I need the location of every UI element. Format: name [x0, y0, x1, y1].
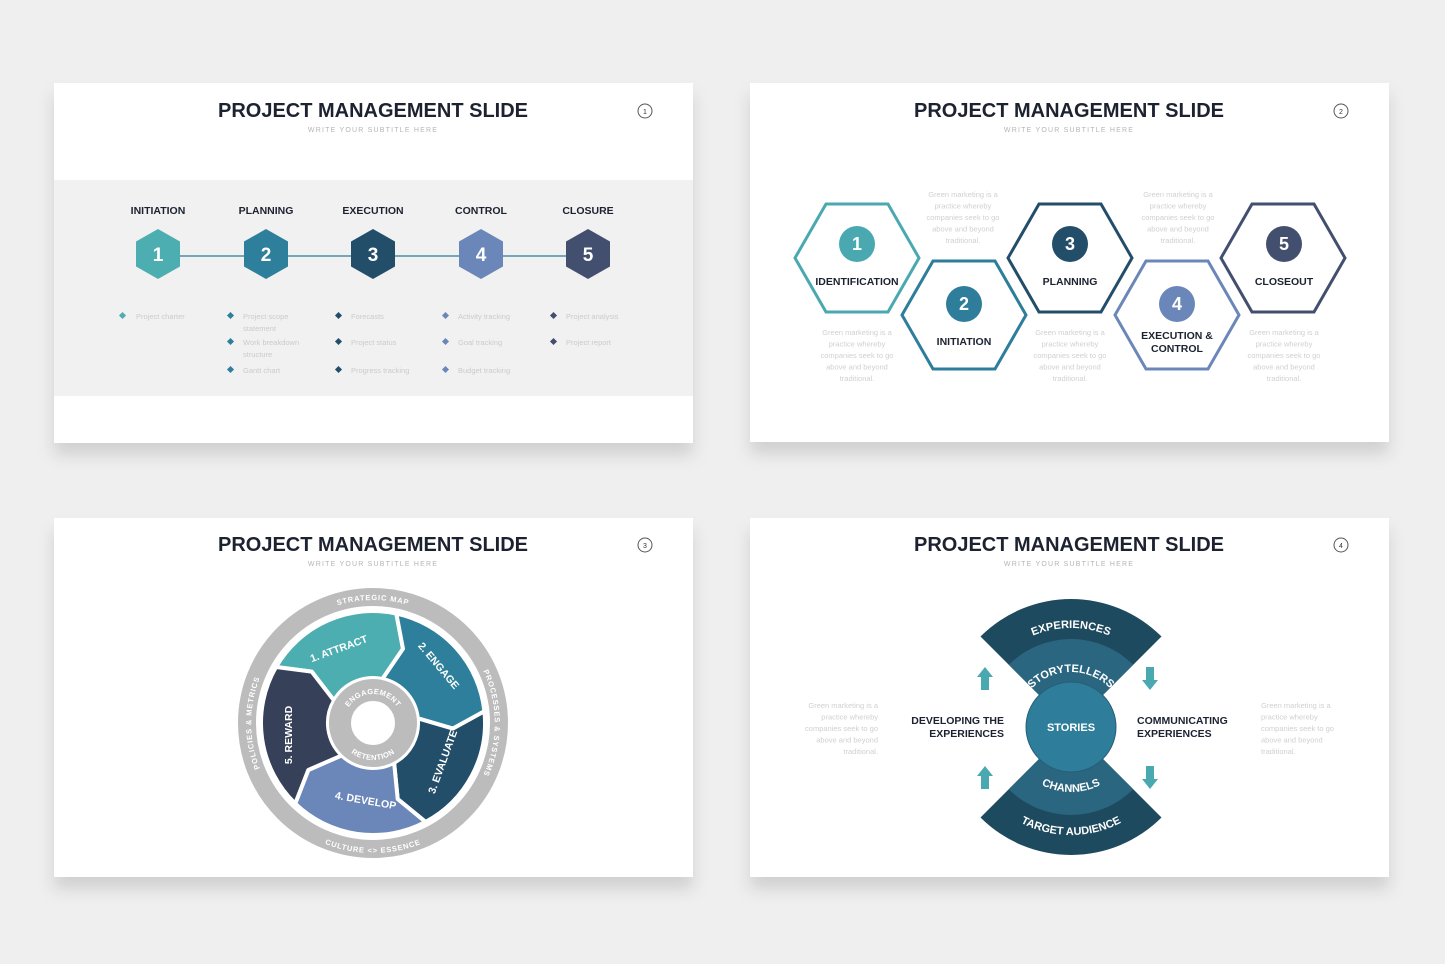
- bullet lists: Gantt chart: [243, 366, 281, 375]
- description texts: Green marketing is a: [822, 328, 893, 337]
- bullet lists: Budget tracking: [458, 366, 510, 375]
- page number: 3: [643, 543, 647, 550]
- bowtie diagram: EXPERIENCES: [1030, 620, 1111, 636]
- hexagons: [795, 204, 1345, 369]
- description texts: traditional.: [840, 374, 874, 383]
- bullet lists: Forecasts: [351, 312, 384, 321]
- page number: [1334, 538, 1348, 552]
- description texts: above and beyond: [932, 224, 994, 234]
- step circles and labels: 3: [1065, 234, 1075, 254]
- side descriptions: above and beyond: [816, 736, 878, 744]
- description texts: practice whereby: [1042, 340, 1099, 348]
- wheel segments: [261, 611, 485, 835]
- step circles and labels: 1: [852, 234, 862, 254]
- bullet lists: Project analysis: [566, 312, 619, 321]
- step circles and labels: CONTROL: [1151, 343, 1204, 355]
- panel: slide 1 timeline: [54, 83, 693, 443]
- subtitle: WRITE YOUR SUBTITLE HERE: [1004, 127, 1134, 134]
- description texts: companies seek to go: [1142, 213, 1214, 222]
- segment labels: 1. ATTRACT: [309, 633, 370, 665]
- step circles and labels: EXECUTION &: [1141, 330, 1213, 342]
- segment labels: [283, 633, 461, 812]
- bullet lists: Work breakdown: [243, 338, 299, 347]
- description texts: above and beyond: [1147, 224, 1209, 234]
- description texts: companies seek to go: [1248, 351, 1320, 360]
- bullet lists: Progress tracking: [351, 366, 409, 375]
- panel: slide 2 hexagon process: [750, 83, 1389, 442]
- subtitle: WRITE YOUR SUBTITLE HERE: [308, 561, 438, 568]
- hexagon timeline: 1: [153, 245, 164, 266]
- side descriptions: companies seek to go: [805, 724, 878, 733]
- side descriptions: Green marketing is a: [808, 701, 879, 710]
- outer ring: PROCESSES & SYSTEMS: [484, 669, 500, 776]
- bowtie diagram: TARGET AUDIENCE: [1022, 816, 1121, 836]
- title: PROJECT MANAGEMENT SLIDE: [218, 534, 528, 556]
- side descriptions: Green marketing is a: [1261, 701, 1331, 710]
- bullet lists: structure: [243, 350, 272, 359]
- hexagon timeline: 5: [583, 245, 594, 266]
- outer ring: [238, 588, 508, 858]
- title: PROJECT MANAGEMENT SLIDE: [218, 100, 528, 122]
- bowtie diagram: STORYTELLERS: [1028, 664, 1114, 688]
- description texts: companies seek to go: [821, 351, 893, 360]
- side labels: [911, 715, 1228, 740]
- phase headings: CONTROL: [455, 205, 508, 217]
- subtitle: WRITE YOUR SUBTITLE HERE: [308, 127, 438, 134]
- bullet lists: statement: [243, 324, 277, 333]
- hexagon timeline: [136, 229, 610, 279]
- description texts: practice whereby: [829, 340, 886, 348]
- page number: 1: [643, 109, 647, 116]
- side descriptions: practice whereby: [821, 712, 878, 722]
- phase headings: [131, 205, 614, 217]
- side labels: EXPERIENCES: [929, 728, 1004, 740]
- description texts: companies seek to go: [927, 213, 999, 222]
- description texts: Green marketing is a: [928, 190, 999, 199]
- page number: 2: [1339, 109, 1343, 116]
- bullet lists: Project status: [351, 338, 397, 347]
- description texts: Green marketing is a: [1143, 190, 1214, 199]
- outer ring: STRATEGIC MAP: [336, 594, 408, 605]
- hexagon timeline: 4: [476, 245, 487, 266]
- description texts: Green marketing is a: [1249, 328, 1320, 337]
- step circles and labels: PLANNING: [1043, 276, 1097, 288]
- title: PROJECT MANAGEMENT SLIDE: [914, 100, 1224, 122]
- description texts: above and beyond: [1253, 362, 1315, 372]
- description texts: practice whereby: [1150, 202, 1207, 210]
- step circles and labels: 5: [1279, 234, 1289, 254]
- side labels: COMMUNICATING: [1137, 715, 1228, 727]
- side labels: DEVELOPING THE: [911, 715, 1004, 727]
- bowtie diagram: CHANNELS: [1042, 778, 1100, 792]
- step circles and labels: 4: [1172, 294, 1182, 314]
- page number: 4: [1339, 543, 1343, 550]
- bullet lists: Project charter: [136, 312, 185, 321]
- phase headings: PLANNING: [239, 205, 293, 217]
- page number: [1334, 104, 1348, 118]
- side labels: EXPERIENCES: [1137, 728, 1212, 740]
- step circles and labels: 2: [959, 294, 969, 314]
- arrows: [977, 667, 1158, 789]
- inner ring: RETENTION: [352, 748, 394, 760]
- description texts: practice whereby: [935, 202, 992, 210]
- panel: slide 4 stories diagram: [746, 518, 1394, 894]
- description texts: companies seek to go: [1034, 351, 1106, 360]
- phase headings: INITIATION: [131, 205, 185, 217]
- description texts: [821, 190, 1320, 383]
- outer ring: POLICIES & METRICS: [246, 677, 260, 770]
- phase headings: CLOSURE: [562, 205, 614, 217]
- side descriptions: practice whereby: [1261, 712, 1318, 722]
- phase headings: EXECUTION: [342, 205, 404, 217]
- side descriptions: [805, 701, 1334, 756]
- segment labels: 2. ENGAGE: [415, 640, 461, 692]
- page number: [638, 538, 652, 552]
- side descriptions: traditional.: [843, 747, 878, 756]
- segment labels: 3. EVALUATE: [426, 729, 460, 795]
- step circles and labels: INITIATION: [937, 336, 991, 348]
- page number: [638, 104, 652, 118]
- description texts: traditional.: [1267, 374, 1301, 383]
- bullet lists: Project scope: [243, 312, 288, 321]
- panel: slide 3 cycle wheel: [50, 518, 698, 894]
- description texts: above and beyond: [826, 362, 888, 372]
- inner ring: [329, 679, 417, 767]
- hexagon timeline: 2: [261, 245, 271, 266]
- side descriptions: companies seek to go: [1261, 724, 1334, 733]
- bullet lists: Goal tracking: [458, 338, 502, 347]
- side descriptions: traditional.: [1261, 747, 1296, 756]
- title: PROJECT MANAGEMENT SLIDE: [914, 534, 1224, 556]
- description texts: traditional.: [1161, 236, 1195, 245]
- inner ring: ENGAGEMENT: [344, 688, 402, 707]
- step circles and labels: [815, 226, 1314, 355]
- bullet lists: [119, 312, 619, 375]
- bullet lists: Activity tracking: [458, 312, 510, 321]
- bowtie diagram: STORIES: [1047, 722, 1095, 734]
- step circles and labels: CLOSEOUT: [1255, 276, 1314, 288]
- bowtie diagram: [980, 599, 1162, 855]
- outer ring: CULTURE <> ESSENCE: [326, 840, 420, 853]
- hexagon timeline: 3: [368, 245, 378, 266]
- description texts: above and beyond: [1039, 362, 1101, 372]
- segment labels: 4. DEVELOP: [334, 790, 397, 812]
- side descriptions: above and beyond: [1261, 736, 1323, 744]
- description texts: traditional.: [1053, 374, 1087, 383]
- description texts: practice whereby: [1256, 340, 1313, 348]
- description texts: Green marketing is a: [1035, 328, 1106, 337]
- description texts: traditional.: [946, 236, 980, 245]
- subtitle: WRITE YOUR SUBTITLE HERE: [1004, 561, 1134, 568]
- bullet lists: Project report: [566, 338, 612, 347]
- segment labels: 5. REWARD: [283, 705, 295, 764]
- step circles and labels: IDENTIFICATION: [815, 276, 899, 288]
